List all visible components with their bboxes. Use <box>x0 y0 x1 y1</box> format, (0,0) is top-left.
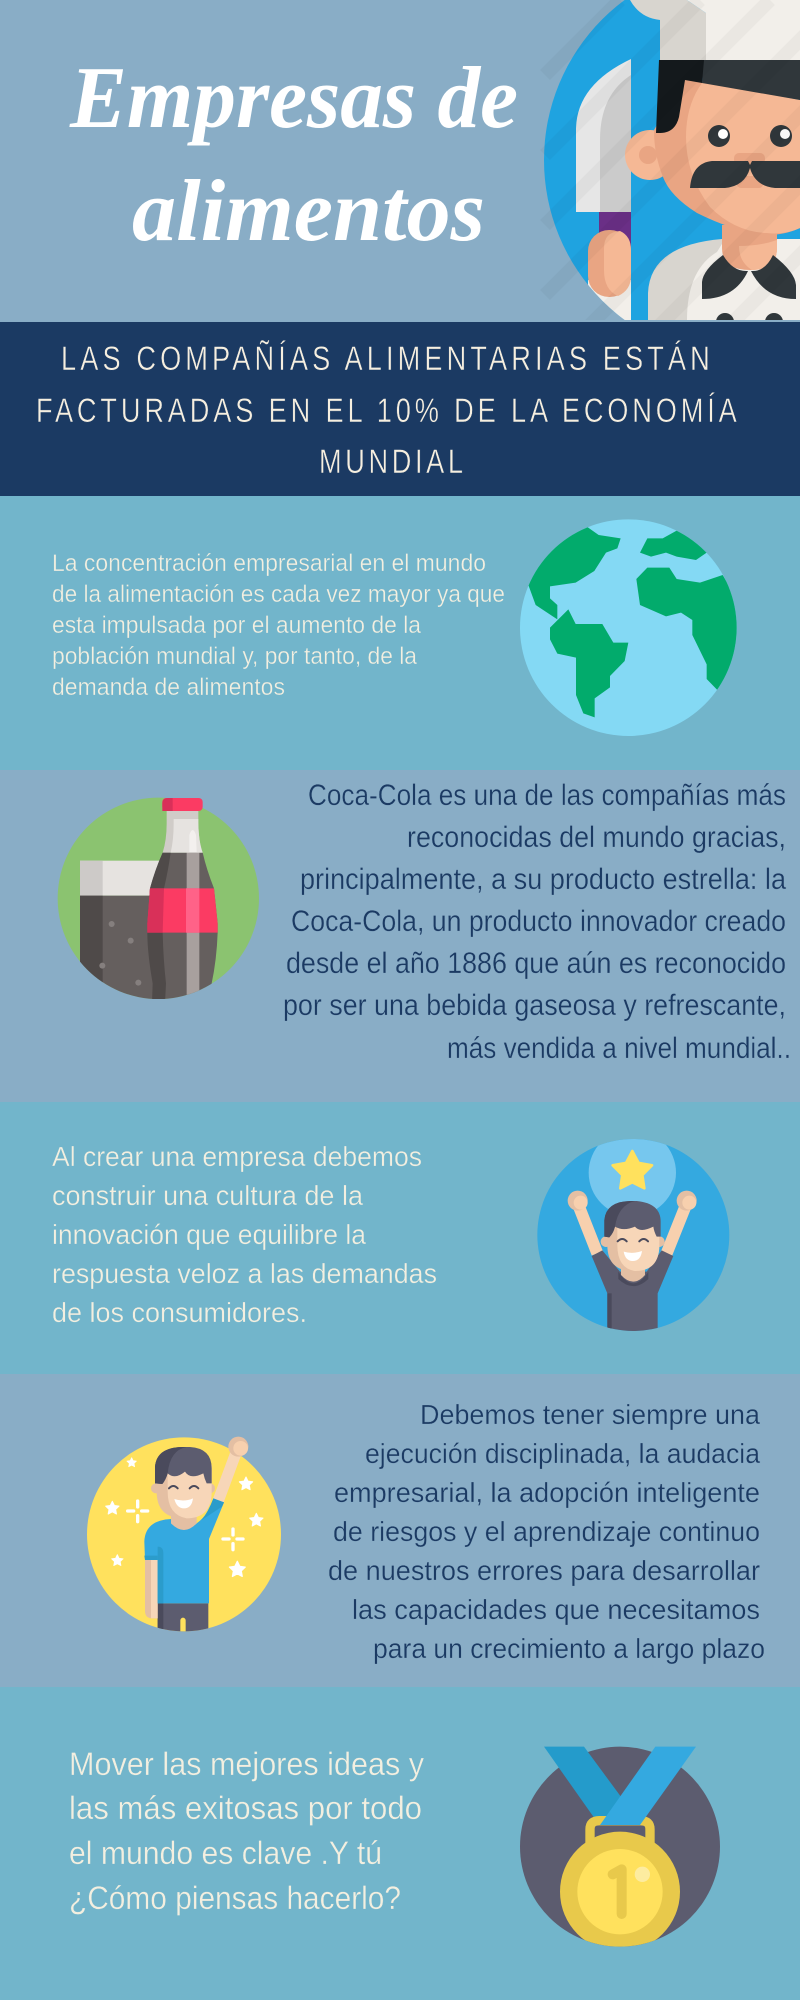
icon part: star <box>613 1151 652 1188</box>
heading <box>36 339 737 481</box>
icon: gold medal <box>520 1747 720 1952</box>
title: Empresas de <box>69 50 518 147</box>
text block: closing question: Mover las mejores ideas y <box>69 1746 424 1782</box>
icon: person cheering with star <box>537 1129 729 1333</box>
icon part: hand <box>588 230 631 297</box>
heading: LAS COMPAÑÍAS ALIMENTARIAS ESTÁN <box>61 339 710 378</box>
icon part: bottle neck <box>163 811 203 853</box>
panel: discipline band <box>0 1374 800 1687</box>
icon part: bottle cap <box>162 798 203 811</box>
icon part: glass <box>80 861 160 1002</box>
text block: concentration: población mundial y, por tanto, de la <box>52 643 418 670</box>
text block: closing question: las más exitosas por todo <box>69 1790 422 1826</box>
text block: discipline: Debemos tener siempre una <box>420 1399 760 1430</box>
text block: Coca-Cola <box>283 779 791 1065</box>
icon part: numeral one <box>613 1869 622 1914</box>
text block: culture of innovation: innovación que equilibre la <box>52 1219 366 1250</box>
text block: culture of innovation: de los consumidores. <box>52 1297 307 1328</box>
text block: culture of innovation: Al crear una empresa debemos <box>52 1141 422 1172</box>
text block: closing question: ¿Cómo piensas hacerlo? <box>69 1880 401 1916</box>
panel: closing band <box>0 1687 800 2000</box>
icon part: knife <box>576 59 631 248</box>
icon part: jacket <box>648 239 800 320</box>
heading: MUNDIAL <box>319 442 463 481</box>
text block: closing question: el mundo es clave .Y tú <box>69 1835 382 1871</box>
icon part: bottle body <box>147 852 218 1003</box>
text block: culture of innovation: construir una cultura de la <box>52 1180 363 1211</box>
text block: closing question <box>69 1746 424 1916</box>
icon part: head <box>151 1447 215 1530</box>
icon: globe <box>517 519 750 736</box>
icon part: sparkles <box>128 1501 243 1550</box>
heading: FACTURADAS EN EL 10% DE LA ECONOMÍA <box>36 391 737 430</box>
icon part: raised arm <box>218 1437 248 1502</box>
text block: discipline: ejecución disciplinada, la audacia <box>365 1438 760 1469</box>
icon part: sleeve <box>588 280 631 320</box>
panel: navy heading band <box>0 322 800 496</box>
icon part: highlight <box>635 1867 650 1882</box>
text block: discipline: las capacidades que necesitamos <box>352 1594 760 1625</box>
icon part: hat <box>630 0 800 133</box>
icon: cola bottle and glass <box>58 798 259 1003</box>
text block: discipline: para un crecimiento a largo plazo <box>373 1633 765 1664</box>
icon: person raising arm <box>87 1437 281 1634</box>
icon part: arms <box>568 1191 697 1253</box>
icon part: ribbon back <box>544 1747 623 1825</box>
text block: concentration: de la alimentación es cada vez mayor ya que <box>52 581 505 608</box>
icon part: eyes <box>708 125 792 147</box>
icon part: shorts <box>158 1603 208 1634</box>
text block: culture of innovation: respuesta veloz a las demandas <box>52 1258 437 1289</box>
icon part: diagonal stripes <box>545 0 800 325</box>
icon part: shirt <box>144 1498 224 1603</box>
icon part: ear <box>625 130 663 180</box>
text block: concentration: esta impulsada por el aumento de la <box>52 612 422 639</box>
panel: Coca-Cola band <box>0 770 800 1102</box>
text block: discipline: de riesgos y el aprendizaje continuo <box>333 1516 760 1547</box>
icon part: head <box>601 1201 665 1282</box>
panel: world band <box>0 496 800 770</box>
icon part: bow tie <box>702 255 796 299</box>
text block: discipline <box>328 1399 765 1664</box>
icon part: nose and moustache <box>690 153 800 188</box>
icon part: stars <box>106 1458 263 1576</box>
text block: discipline: de nuestros errores para desarrollar <box>328 1555 760 1586</box>
title: alimentos <box>132 163 485 260</box>
text block: concentration: La concentración empresarial en el mundo <box>52 550 486 577</box>
icon part: face <box>654 78 800 235</box>
icon: chef with knife <box>544 0 800 320</box>
panel: header background <box>0 0 800 322</box>
text block: concentration: demanda de alimentos <box>52 674 285 701</box>
icon part: neck <box>722 225 777 270</box>
text block: discipline: empresarial, la adopción inteligente <box>334 1477 760 1508</box>
text block: concentration <box>52 550 505 701</box>
icon part: left arm <box>145 1557 158 1618</box>
icon part: medal disc <box>560 1832 680 1952</box>
panel: culture band <box>0 1102 800 1374</box>
icon part: medal ring <box>590 1821 650 1843</box>
title <box>69 50 518 260</box>
icon part: ribbon front <box>600 1747 696 1825</box>
icon part: shirt <box>592 1250 673 1333</box>
text block: culture of innovation <box>52 1141 437 1328</box>
